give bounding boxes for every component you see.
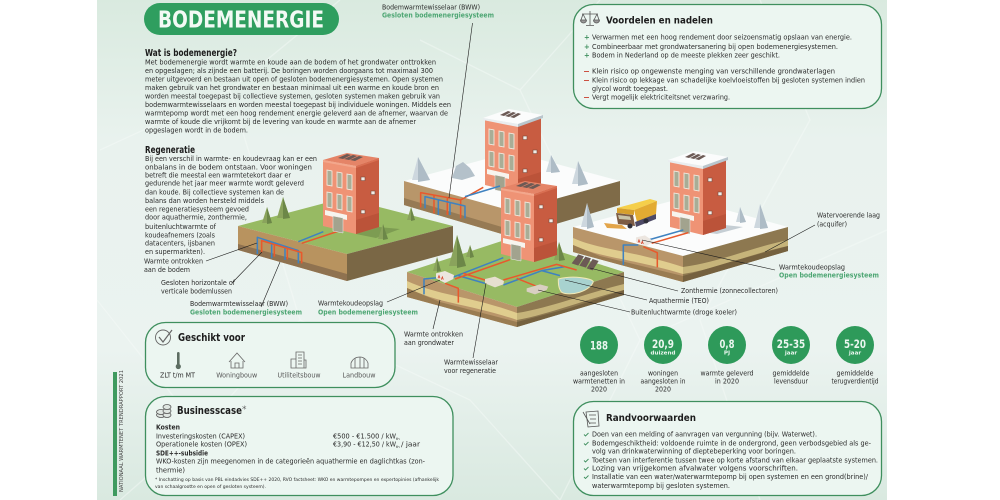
stat: 25-35 jaar: jaar xyxy=(784,350,797,356)
icon: checklist xyxy=(583,411,599,427)
text block: regeneratie: gedurende het jaar meer warmte wordt geleverd xyxy=(145,180,304,188)
label: warmtekoudeopslag centre xyxy=(318,299,418,316)
label: warmte ontrokken aan de bodem: aan de bodem xyxy=(144,266,190,274)
icon: coins xyxy=(156,404,171,418)
text block: regeneratie: door aquathermie, zonthermie, xyxy=(145,214,247,222)
checklist xyxy=(584,430,878,490)
checklist: waterwarmtepomp bij gesloten systemen. xyxy=(592,482,730,490)
sde subsidie xyxy=(156,449,426,474)
stat: 188: 2020 xyxy=(591,385,607,393)
footnote: van schaalgrootte en open of gesloten systeem). xyxy=(155,484,266,490)
label: aquathermie: Aquathermie (TEO) xyxy=(649,297,709,305)
stat: 5-20 jaar: terugverdientijd xyxy=(832,377,878,385)
checklist: Doen van een melding of aanvragen van vergunning (bijv. Waterwet). xyxy=(592,430,817,438)
stat: 188: aangesloten xyxy=(580,369,618,377)
background xyxy=(97,0,887,500)
label: warmtewisselaar xyxy=(444,358,498,375)
text block: regeneratie: onbalans in de bodem ontstaan. Voor woningen xyxy=(145,163,312,171)
list: voordelen: Bodem in Nederland op de meeste plekken zeer geschikt. xyxy=(592,51,780,59)
list: nadelen: Vergt mogelijk elektriciteitsnet verzwaring. xyxy=(592,93,730,101)
label: warmtewisselaar: voor regeneratie xyxy=(444,367,496,375)
text block: wat is bodemenergie: maken gebruik van het grondwater en bestaan minimaal uit een warme en koude bron en xyxy=(145,84,439,92)
kosten: Operationele kosten (OPEX) xyxy=(156,440,247,448)
kosten: Kosten xyxy=(156,423,180,431)
text block: regeneratie: en supermarkten). xyxy=(145,248,205,256)
stat: 5-20 jaar: jaar xyxy=(848,350,861,356)
checklist: Toetsen van interferentie tussen twee op korte afstand van elkaar geplaatste systemen. xyxy=(591,456,878,464)
text block: wat is bodemenergie: worden meestal toegepast bij collectieve systemen, gesloten systemen maken gebruik van xyxy=(145,92,440,100)
stat: 20,9 duizend: duizend xyxy=(650,350,676,356)
sde subsidie: WKO-kosten zijn meegenomen in de categorieën aquathermie en daglichtkas (zon- xyxy=(156,457,426,465)
stat: 25-35 jaar: levensduur xyxy=(774,377,808,385)
illustration: snow block with open system xyxy=(573,198,788,282)
text block: wat is bodemenergie: bodemwarmtewisselaars en worden meestal toegepast bij individuele woningen. Middels een xyxy=(145,101,451,109)
illustration: green block with closed system xyxy=(238,197,453,281)
label: BWW top: Bodemwarmtewisselaar (BWW) xyxy=(382,3,480,11)
item: utiliteitsbouw: Utiliteitsbouw xyxy=(278,371,321,379)
label: watervoerende laag: Watervoerende laag xyxy=(817,211,880,219)
stat: 25-35 jaar: 25-35 xyxy=(777,337,805,351)
label: warmtekoudeopslag centre: Open bodemenergiesysteem xyxy=(318,308,418,316)
list: voordelen: Combineerbaar met grondwatersanering bij open bodemenergiesystemen. xyxy=(592,43,838,51)
stat: 5-20 jaar: gemiddelde xyxy=(836,369,874,377)
illustration: snow block with closed system (back) xyxy=(404,152,620,237)
text block: wat is bodemenergie: warmte of koude die vrijkomt bij de levering van koude en warmte aan de afnemer xyxy=(145,118,416,126)
stat: 20,9 duizend: aangesloten in xyxy=(640,377,686,385)
checklist: Lozing van vrijgekomen afvalwater volgens voorschriften. xyxy=(592,465,798,473)
label: warmtekoudeopslag right: Open bodemenergiesysteem xyxy=(779,271,879,279)
list: nadelen: glycol wordt toegepast. xyxy=(592,85,668,93)
panel: businesscase xyxy=(146,396,453,496)
item: thermometer xyxy=(160,352,196,379)
list: voordelen xyxy=(584,33,852,60)
label: BWW top: Gesloten bodemenergiesysteem xyxy=(382,11,494,19)
vertical report label xyxy=(113,370,125,496)
title: BODEMENERGIE xyxy=(158,8,324,34)
item: woningbouw xyxy=(216,353,258,379)
stat: 20,9 duizend xyxy=(640,326,686,393)
kosten: €3,90 - €12,50 / kW xyxy=(333,440,396,448)
list: nadelen: Klein risico op lekkage van schadelijke koelvloeistoffen bij gesloten systemen indien xyxy=(592,76,865,84)
vertical report label: NATIONAAL WARMTENET TRENDRAPPORT 2021 xyxy=(119,370,125,492)
label: warmte ontrokken aan de bodem: Warmte ontrokken xyxy=(144,257,203,265)
sde subsidie: thermie) xyxy=(156,466,185,474)
text block: regeneratie: dan koude. Bij collectieve systemen kan de xyxy=(145,189,284,197)
stat: 5-20 jaar: 5-20 xyxy=(844,337,866,351)
kosten xyxy=(156,423,420,449)
heading: Geschikt voor xyxy=(178,332,246,344)
stat: 188: 188 xyxy=(590,338,608,352)
list: voordelen: + xyxy=(584,52,590,60)
icon: scale xyxy=(580,11,600,26)
stat: 0,8 PJ: 0,8 xyxy=(720,337,734,351)
text block: regeneratie: koudeafnemers (zoals xyxy=(145,231,215,239)
stat: 0,8 PJ: PJ xyxy=(724,350,730,356)
text block: regeneratie: betreft die meestal een warmtetekort daar er xyxy=(145,172,291,180)
text block: regeneratie: Regeneratie xyxy=(145,145,195,156)
heading: Randvoorwaarden xyxy=(606,413,696,424)
label: warmtekoudeopslag centre: Warmtekoudeopslag xyxy=(318,299,383,307)
illustration: green block with open system and regeneration xyxy=(407,235,624,327)
text block: wat is bodemenergie: Wat is bodemenergie? xyxy=(145,48,237,59)
kosten: th xyxy=(396,437,400,441)
illustration: building on snow block xyxy=(483,109,543,193)
label: warmte aan grondwater: Warmte ontrokken xyxy=(404,330,463,338)
text block: wat is bodemenergie: warmtepomp wordt met een hoog rendement energie geleverd aan de afnemer, waarvan de xyxy=(145,109,448,117)
text block: regeneratie: balans dan worden hersteld middels xyxy=(145,197,264,205)
kosten: €500 - €1.500 / kW xyxy=(333,432,396,440)
sde subsidie: SDE++-subsidie xyxy=(156,449,208,457)
label: bodemlussen: verticale bodemlussen xyxy=(161,287,232,295)
panel: voordelen en nadelen xyxy=(574,4,882,108)
kosten: th xyxy=(396,445,400,449)
label: BWW bottom xyxy=(190,300,302,316)
stat: 188 xyxy=(573,326,625,393)
stat: 0,8 PJ: warmte geleverd xyxy=(700,369,754,377)
panel: randvoorwaarden xyxy=(574,402,882,496)
illustration: central building xyxy=(501,181,557,262)
label: watervoerende laag xyxy=(817,211,880,228)
item: thermometer: ZLT t/m MT xyxy=(160,371,196,379)
leader lines xyxy=(206,23,815,358)
list: voordelen: Verwarmen met een hoog rendement door seizoensmatig opslaan van energie. xyxy=(592,33,852,41)
item: woningbouw: Woningbouw xyxy=(216,371,258,379)
checklist: Bodemgeschiktheid: voldoende ruimte in de ondergrond, geen verbodsgebied als ge- xyxy=(592,439,872,447)
text block: regeneratie: buitenluchtwarmte of xyxy=(145,223,217,231)
text block: wat is bodemenergie: Met bodemenergie wordt warmte en koude aan de bodem of het grondwater onttrokken xyxy=(145,58,436,66)
label: BWW bottom: Bodemwarmtewisselaar (BWW) xyxy=(190,300,288,308)
label: watervoerende laag: (acquifer) xyxy=(817,220,847,228)
list: nadelen xyxy=(584,67,865,101)
kosten: / jaar xyxy=(401,440,420,448)
item: landbouw xyxy=(342,357,376,379)
stat: 25-35 jaar: gemiddelde xyxy=(772,369,810,377)
stat: 20,9 duizend: 20,9 xyxy=(652,337,674,351)
label: buitenluchtwarmte: Buitenluchtwarmte (droge koeler) xyxy=(631,308,737,316)
illustration: salt truck xyxy=(604,199,657,229)
text block: wat is bodemenergie xyxy=(145,48,451,134)
footnote: * Inschatting op basis van PBL eindadvies SDE++ 2020, RVO factsheet: WKO en warmtepompen en expertopinies (afhankelijk xyxy=(155,477,439,483)
item: utiliteitsbouw xyxy=(278,352,321,379)
label: warmtekoudeopslag right xyxy=(779,263,879,279)
stat: 25-35 jaar xyxy=(772,326,810,385)
item: landbouw: Landbouw xyxy=(342,371,376,379)
label: BWW top xyxy=(382,3,494,19)
icon: check circle xyxy=(156,330,172,345)
stat: 5-20 jaar xyxy=(832,326,878,385)
illustration: pipes in snow block xyxy=(421,186,500,218)
text block: regeneratie: Bij een verschil in warmte- en koudevraag kan er een xyxy=(145,155,317,163)
panel: geschikt voor xyxy=(146,322,395,388)
stat: 0,8 PJ: in 2020 xyxy=(715,377,739,385)
illustration: building on green block xyxy=(323,153,379,234)
illustration: building on snow block right xyxy=(668,151,728,235)
heading: Voordelen en nadelen xyxy=(606,16,713,26)
text block: regeneratie: datacenters, ijsbanen xyxy=(145,239,215,247)
list: voordelen: + xyxy=(584,43,590,51)
text block: regeneratie xyxy=(145,145,317,256)
stat: 188: warmtenetten in xyxy=(573,377,625,385)
text block: wat is bodemenergie: meter uitgevoerd en bestaan uit open of gesloten bodemenergiesystemen. Open systemen xyxy=(145,75,443,83)
list: voordelen: + xyxy=(584,34,590,42)
illustration: pipes in right snow block xyxy=(623,230,688,267)
text block: wat is bodemenergie: opgeslagen wordt in de bodem. xyxy=(145,126,248,134)
label: bodemlussen: Gesloten horizontale of xyxy=(161,279,236,287)
label: BWW bottom: Gesloten bodemenergiesysteem xyxy=(190,308,302,316)
label: warmte ontrokken aan de bodem xyxy=(144,257,203,274)
text block: wat is bodemenergie: en opgeslagen; als zijnde een batterij. De boringen worden doorgaans tot maximaal 300 xyxy=(145,67,433,75)
text block: regeneratie: een regeneratiesysteem gevoed xyxy=(145,205,249,213)
label: warmtekoudeopslag right: Warmtekoudeopslag xyxy=(779,263,845,271)
title xyxy=(144,3,339,35)
heading: Businesscase xyxy=(177,405,242,417)
label: warmtewisselaar: Warmtewisselaar xyxy=(444,358,498,366)
label: warmte aan grondwater xyxy=(404,330,463,347)
label: bodemlussen xyxy=(161,279,236,295)
stat: 20,9 duizend: woningen xyxy=(648,369,678,377)
checklist: volg van drinkwaterwinning of dieptebeperking voor boringen. xyxy=(592,448,796,456)
label: warmte aan grondwater: aan grondwater xyxy=(404,339,454,347)
heading: * xyxy=(242,405,247,415)
stat: 20,9 duizend: 2020 xyxy=(655,385,671,393)
stat: 0,8 PJ xyxy=(700,326,754,385)
label: zonthermie: Zonthermie (zonnecollectoren) xyxy=(681,287,778,295)
footnote xyxy=(155,477,439,490)
checklist: Installatie van een water/waterwarmtepomp bij open systemen en een grond(brine)/ xyxy=(592,473,869,481)
kosten: Investeringskosten (CAPEX) xyxy=(156,432,245,440)
list: nadelen: Klein risico op ongewenste menging van verschillende grondwaterlagen xyxy=(592,67,835,75)
